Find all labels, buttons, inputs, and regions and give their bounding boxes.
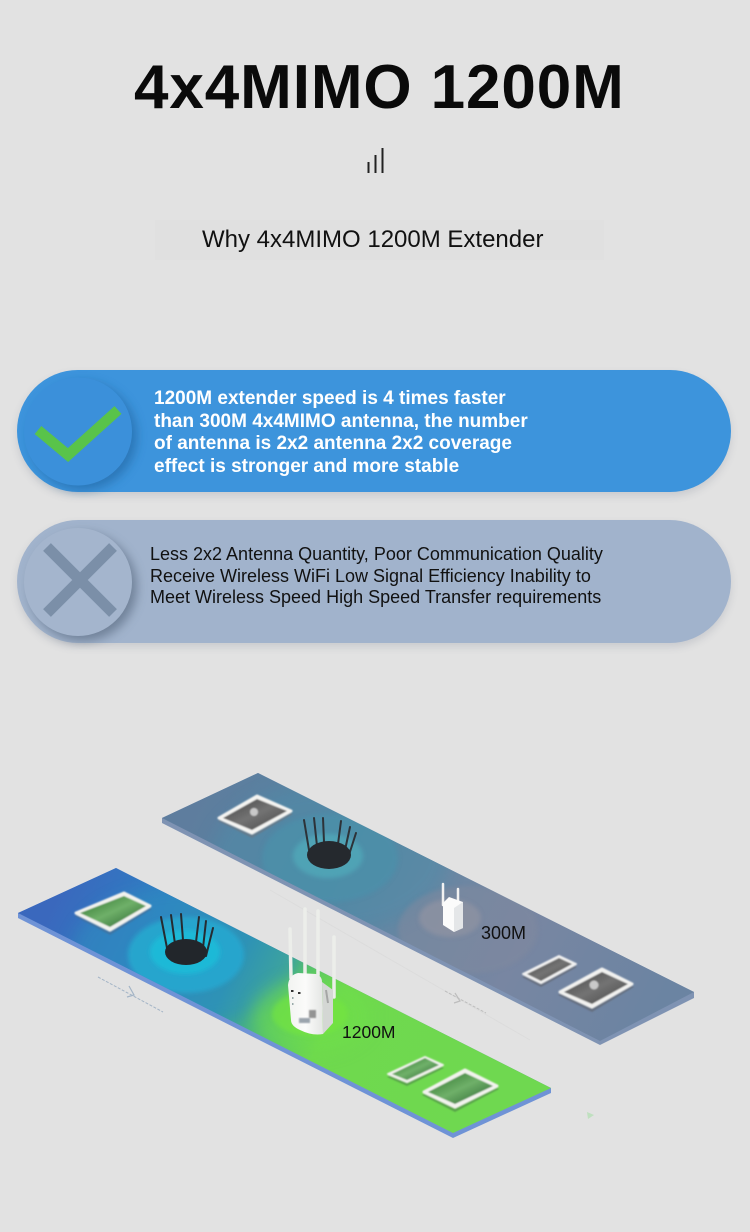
text block: advantage description: of antenna is 2x2 antenna 2x2 coverage xyxy=(154,433,512,454)
icon: grey tablet, top left xyxy=(218,796,293,838)
icon: black router, green plane xyxy=(161,914,213,965)
subtitle text: Why 4x4MIMO 1200M Extender xyxy=(202,226,543,253)
icon: grey tablet, bottom right xyxy=(558,969,634,1012)
text block: weakness description xyxy=(150,544,603,607)
text block: advantage description: 1200M extender speed is 4 times faster xyxy=(154,388,506,409)
icon: black router, top plane xyxy=(304,818,356,869)
text block: advantage description: effect is stronger and more stable xyxy=(154,456,459,477)
arrow: 300M direction xyxy=(270,890,530,1040)
title: 4x4MIMO 1200M xyxy=(134,53,625,122)
panel: advantage of 1200M xyxy=(17,370,731,492)
diagram: coverage comparison xyxy=(18,773,694,1138)
subtitle band xyxy=(155,220,604,260)
icon: green phone xyxy=(387,1057,444,1086)
panel: weakness of 300M xyxy=(17,520,731,643)
icon: green tablet, top left xyxy=(74,893,152,935)
plane: 1200M coverage xyxy=(18,868,551,1138)
icon: signal bars xyxy=(368,148,384,173)
arrow: 1200M direction xyxy=(98,977,163,1012)
text block: weakness description: Receive Wireless WiFi Low Signal Efficiency Inability to xyxy=(150,566,591,586)
label: 300M: 300M xyxy=(481,923,526,943)
icon: cross button xyxy=(24,528,142,647)
plane: 300M coverage xyxy=(162,773,694,1045)
icon: small 300M extender xyxy=(443,884,463,932)
icon: grey phone xyxy=(522,956,577,987)
icon: faint green marker xyxy=(587,1112,594,1119)
text block: weakness description: Meet Wireless Speed High Speed Transfer requirements xyxy=(150,587,601,607)
icon: white 1200M extender xyxy=(288,909,334,1034)
icon: check mark button xyxy=(28,380,140,497)
label: 1200M: 1200M xyxy=(342,1022,396,1042)
text block: advantage description xyxy=(154,388,528,477)
text block: advantage description: than 300M 4x4MIMO antenna, the number xyxy=(154,411,528,432)
icon: green tablet, bottom right xyxy=(422,1070,499,1112)
text block: weakness description: Less 2x2 Antenna Quantity, Poor Communication Quality xyxy=(150,544,603,564)
